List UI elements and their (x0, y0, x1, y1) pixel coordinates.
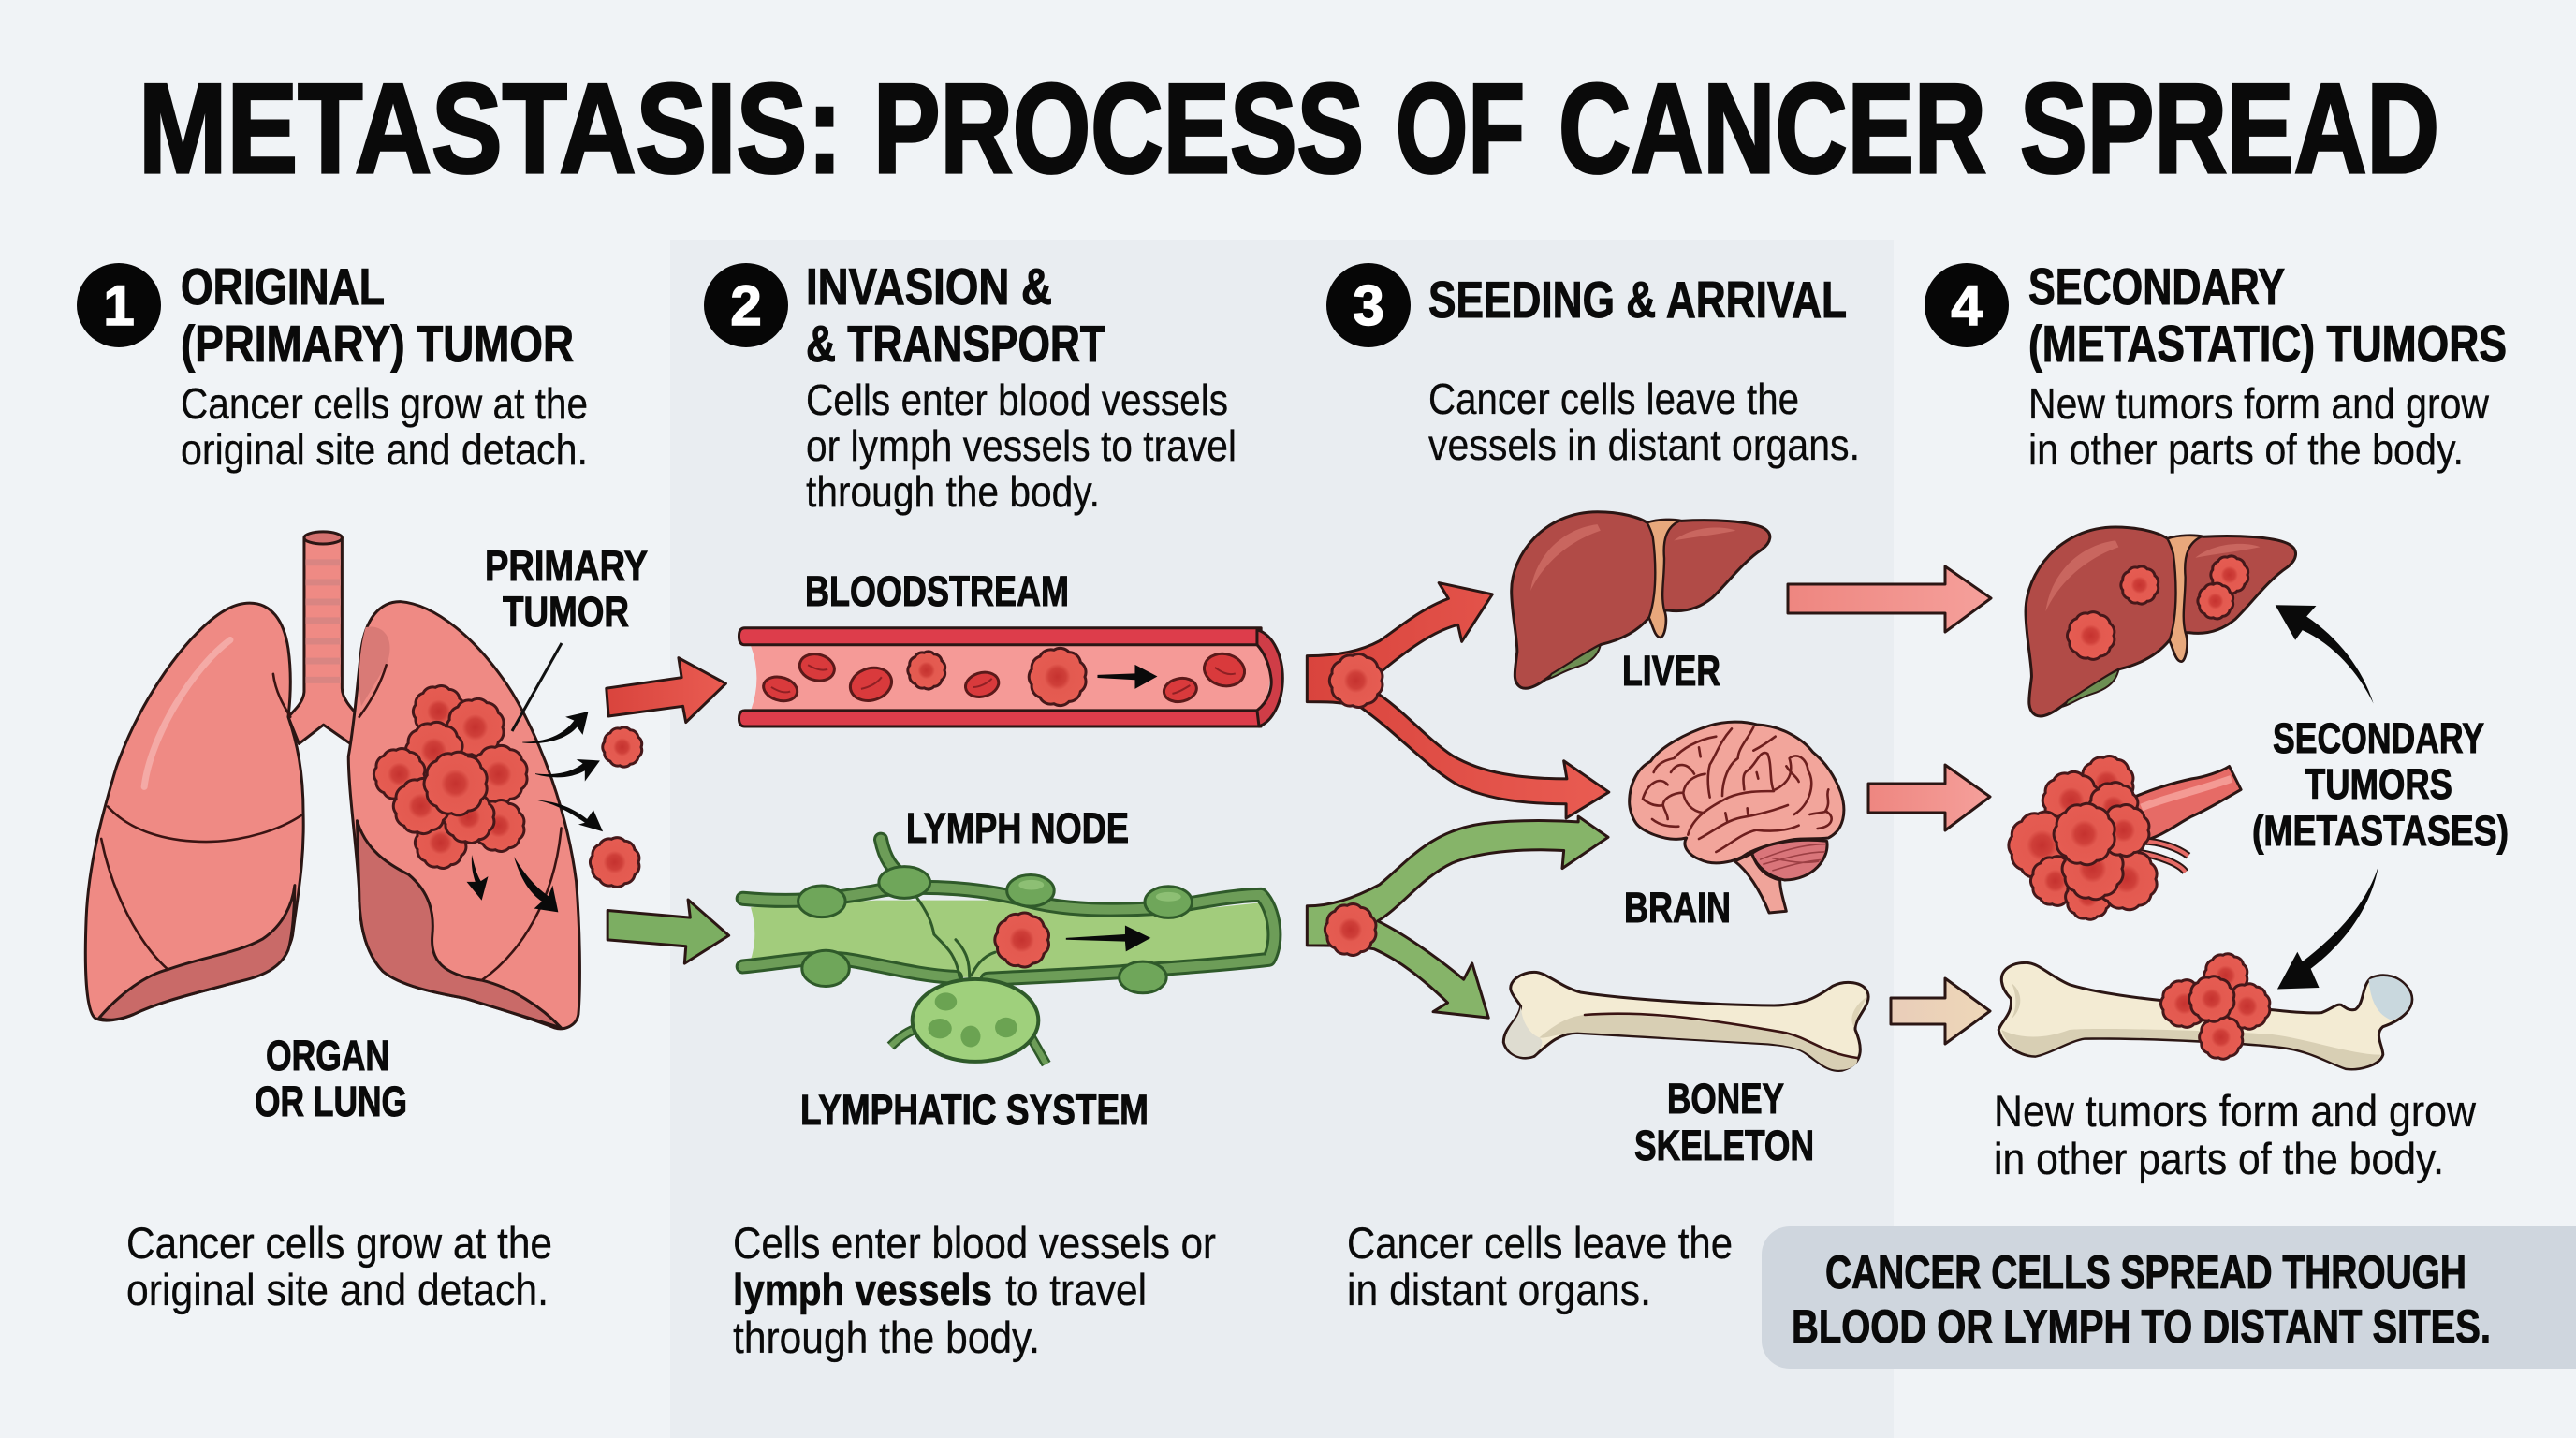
label: boney skeleton: SKELETON (1634, 1122, 1814, 1169)
label: brain: BRAIN (1624, 884, 1731, 932)
arrow: brain to secondary brain (1868, 765, 1990, 830)
step 2 header: & TRANSPORT (806, 315, 1105, 373)
arrow: to lymphatic system (607, 900, 729, 963)
text: step 2 caption: lymph vessels (733, 1265, 992, 1314)
step 2 header: INVASION & (806, 257, 1052, 315)
text: step 2 caption: through the body. (733, 1313, 1040, 1362)
arrow: secondary tumors to bone (2277, 866, 2378, 990)
text: step 3 caption: Cancer cells leave the (1347, 1218, 1733, 1268)
text: step 2 caption (733, 1218, 1216, 1362)
label: organ or lung: OR LUNG (255, 1078, 407, 1125)
title: METASTASIS: (139, 57, 842, 199)
text: step 3 caption: in distant organs. (1347, 1265, 1651, 1314)
label: secondary tumors: SECONDARY (2273, 714, 2484, 762)
step 2 header (704, 257, 1237, 516)
step 2 header: or lymph vessels to travel (806, 421, 1237, 470)
illustration: liver with metastases (2026, 527, 2296, 716)
step 4 header: SECONDARY (2028, 257, 2285, 315)
callout: summary banner (1762, 1226, 2576, 1369)
step 2 header: Cells enter blood vessels (806, 375, 1228, 424)
label: primary tumor: TUMOR (503, 588, 629, 636)
text: step 2 caption: Cells enter blood vessels or (733, 1218, 1216, 1268)
primary tumor cluster (373, 686, 527, 868)
flow arrow (1066, 925, 1150, 951)
flow arrow (1097, 665, 1157, 689)
label: organ or lung (255, 1032, 407, 1125)
text: step 4 caption: New tumors form and grow (1994, 1086, 2477, 1136)
step 2 header: through the body. (806, 467, 1100, 516)
label: organ or lung: ORGAN (266, 1032, 389, 1079)
illustration: blood vessel (739, 628, 1282, 726)
step 2 header: 2 (730, 274, 762, 337)
step 4 header: New tumors form and grow (2028, 379, 2490, 428)
step 3 header (1326, 263, 1860, 469)
small escape arrows (467, 712, 603, 912)
title: CANCER (1559, 57, 1986, 199)
arrow: secondary tumors to liver (2276, 605, 2374, 704)
step 1 header (77, 257, 588, 474)
step 4 header: in other parts of the body. (2028, 425, 2464, 474)
text: step 1 caption: Cancer cells grow at the (126, 1218, 552, 1268)
label: boney skeleton (1634, 1075, 1814, 1169)
illustration: bone (1503, 972, 1868, 1071)
title: OF (1396, 57, 1525, 199)
step 1 header: 1 (103, 274, 135, 337)
step 4 header (1925, 257, 2507, 474)
illustration: liver (1512, 512, 1770, 688)
arrow: to bloodstream (607, 658, 725, 723)
lymph node body (913, 979, 1038, 1062)
left lung (85, 603, 303, 1020)
step 3 header: SEEDING & ARRIVAL (1428, 271, 1847, 329)
leader line (512, 643, 562, 731)
text: step 1 caption: original site and detach. (126, 1265, 549, 1314)
step 1 header: original site and detach. (181, 425, 588, 474)
text: step 1 caption (126, 1218, 552, 1314)
illustration: brain metastasis cluster with vessel (2009, 756, 2241, 919)
step 4 header: 4 (1951, 274, 1983, 337)
step 3 header: vessels in distant organs. (1428, 420, 1860, 469)
panel: middle columns shading (670, 240, 1894, 1438)
step 1 header: ORIGINAL (181, 257, 385, 315)
label: secondary tumors: (METASTASES) (2252, 807, 2509, 855)
label: primary tumor: PRIMARY (485, 542, 648, 590)
label: lymph node: LYMPH NODE (906, 804, 1129, 852)
detached cells (590, 727, 642, 887)
right lung (348, 602, 579, 1029)
step 1 header: Cancer cells grow at the (181, 379, 588, 428)
text: step 2 caption: to travel (1005, 1265, 1147, 1314)
red blood cells (760, 649, 1250, 707)
label: secondary tumors (2252, 714, 2509, 855)
text: step 3 caption (1347, 1218, 1733, 1314)
trachea (288, 532, 359, 743)
arrows: blood route branching to liver and brain (1307, 583, 1609, 818)
illustration: bone with metastases (1998, 954, 2412, 1069)
illustration: lymphatic vessel and node (743, 840, 1274, 1064)
label: liver: LIVER (1622, 647, 1720, 695)
text: step 4 caption (1994, 1086, 2477, 1183)
arrow: bone to secondary bone (1891, 978, 1990, 1044)
arrow: liver to secondary liver (1788, 566, 1991, 632)
illustration: lungs with primary tumor (85, 532, 642, 1029)
illustration: brain (1630, 722, 1844, 913)
title: PROCESS (873, 57, 1364, 199)
label: primary tumor (485, 542, 648, 636)
circulating tumor cells (908, 648, 1086, 706)
step 3 header: Cancer cells leave the (1428, 374, 1799, 423)
label: boney skeleton: BONEY (1667, 1075, 1784, 1123)
text: step 4 caption: in other parts of the body. (1994, 1134, 2444, 1183)
tumor cell in lymph vessel (995, 913, 1048, 967)
step 3 header: 3 (1353, 274, 1384, 337)
label: secondary tumors: TUMORS (2305, 760, 2452, 808)
label: lymphatic system: LYMPHATIC SYSTEM (800, 1086, 1149, 1134)
title: SPREAD (2020, 57, 2439, 199)
title (139, 57, 2439, 199)
label: bloodstream: BLOODSTREAM (805, 567, 1069, 615)
arrows: lymph route branching to brain and bone (1307, 816, 1608, 1018)
step 1 header: (PRIMARY) TUMOR (181, 315, 574, 373)
